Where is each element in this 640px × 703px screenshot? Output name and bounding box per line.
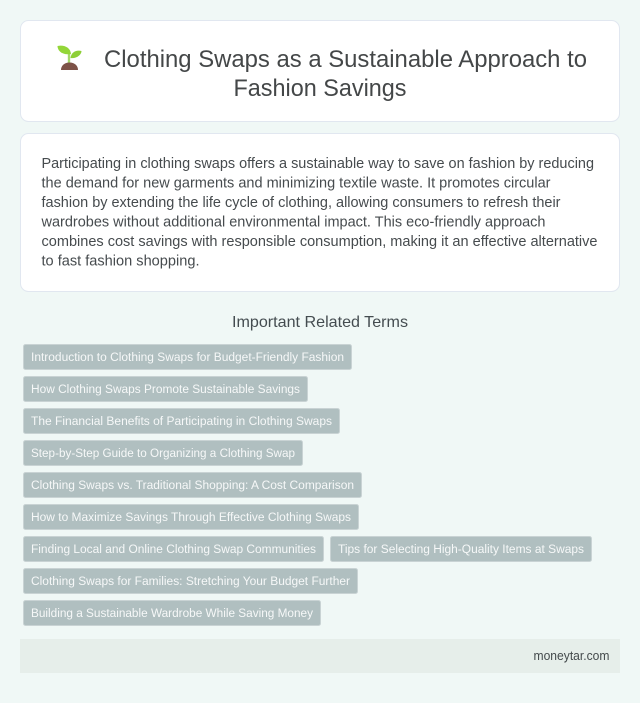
tag: Introduction to Clothing Swaps for Budget-Friendly Fashion <box>31 350 344 364</box>
tag <box>24 440 302 466</box>
footer <box>20 639 620 673</box>
tag <box>24 408 340 434</box>
summary text: fashion by extending the life cycle of clothing, allowing consumers to refresh their <box>42 195 561 211</box>
tag <box>24 536 324 562</box>
summary text: Participating in clothing swaps offers a sustainable way to save on fashion by reducing <box>42 156 594 172</box>
tag: Step-by-Step Guide to Organizing a Clothing Swap <box>31 446 295 460</box>
panel: title card <box>20 20 620 122</box>
panel: summary card <box>20 134 620 292</box>
tag: How to Maximize Savings Through Effective Clothing Swaps <box>31 510 351 524</box>
tag <box>24 504 358 530</box>
tag: Tips for Selecting High-Quality Items at Swaps <box>338 542 584 556</box>
heading: related terms: Important Related Terms <box>232 314 408 331</box>
panel: related term tags <box>24 344 592 626</box>
tag <box>24 344 352 370</box>
tag <box>24 568 358 594</box>
footer source: moneytar.com <box>534 648 610 663</box>
tag: The Financial Benefits of Participating in Clothing Swaps <box>31 414 332 428</box>
tag: How Clothing Swaps Promote Sustainable Savings <box>31 382 300 396</box>
tag: Finding Local and Online Clothing Swap Communities <box>31 542 316 556</box>
tag <box>330 536 592 562</box>
tag: Building a Sustainable Wardrobe While Saving Money <box>31 606 314 620</box>
title: Fashion Savings <box>234 75 406 102</box>
title: Clothing Swaps as a Sustainable Approach to <box>104 46 587 73</box>
summary text: wardrobes without additional environmental impact. This eco-friendly approach <box>40 214 545 230</box>
tag: Clothing Swaps vs. Traditional Shopping: A Cost Comparison <box>31 478 354 492</box>
summary text: the demand for new garments and minimizing textile waste. It promotes circular <box>42 176 551 192</box>
summary text: to fast fashion shopping. <box>42 254 200 270</box>
title <box>104 46 587 102</box>
tag <box>24 472 362 498</box>
summary text: combines cost savings with responsible consumption, making it an effective alternative <box>42 234 598 250</box>
tag <box>24 600 320 626</box>
summary text <box>40 156 597 270</box>
icon: seedling <box>58 46 82 70</box>
tag: Clothing Swaps for Families: Stretching Your Budget Further <box>31 574 350 588</box>
tag <box>24 376 308 402</box>
